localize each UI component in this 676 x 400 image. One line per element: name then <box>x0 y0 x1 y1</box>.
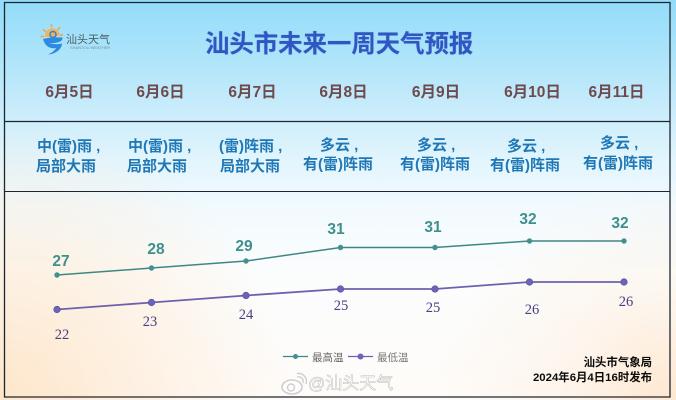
high temperature series: 27 <box>52 253 70 270</box>
weather: June 5: 中(雷)雨 , <box>37 138 100 155</box>
low temperature series: 22 <box>55 327 69 343</box>
weather: June 9 <box>400 136 470 173</box>
icon: sun and wave <box>40 24 64 54</box>
logo text: 汕头天气 <box>66 34 110 46</box>
high temperature series: 29 <box>235 238 253 255</box>
low temperature series: 26 <box>619 294 633 310</box>
date: June 5: 6月5日 <box>45 84 94 101</box>
weather: June 6: 局部大雨 <box>127 158 187 174</box>
title: 汕头市未来一周天气预报 <box>205 31 473 58</box>
logo subtitle: SHANTOU WEATHER <box>70 45 110 50</box>
weather: June 7: 局部大雨 <box>220 158 280 174</box>
watermark text: @汕头天气 <box>308 374 393 393</box>
weather: June 6 <box>127 138 191 174</box>
high temperature series: 31 <box>424 219 442 236</box>
low temperature series <box>54 279 633 343</box>
date: June 7: 6月7日 <box>228 84 277 101</box>
weather: June 9: 多云 , <box>417 136 455 154</box>
icon: weibo <box>281 372 307 395</box>
high temperature series: 32 <box>519 211 537 228</box>
weather: June 10: 多云 , <box>507 138 545 154</box>
high temperature series <box>52 211 629 278</box>
date: June 11: 6月11日 <box>588 84 644 101</box>
high temperature series: 28 <box>147 241 165 258</box>
legend: high: 最高温 <box>312 351 344 364</box>
date: June 10: 6月10日 <box>504 84 561 101</box>
weather: June 5: 局部大雨 <box>36 158 96 174</box>
watermark <box>281 372 393 395</box>
high temperature series: 32 <box>611 215 629 232</box>
weather: June 8: 有(雷)阵雨 <box>303 156 373 173</box>
low temperature series: 25 <box>426 300 440 316</box>
weather row <box>36 135 653 174</box>
low temperature series: 23 <box>143 314 157 330</box>
legend <box>283 351 409 364</box>
low temperature series: 24 <box>239 307 254 323</box>
high temperature series: 31 <box>327 221 345 238</box>
weather: June 8: 多云 , <box>320 136 358 154</box>
weather: June 10: 有(雷)阵雨 <box>490 157 560 174</box>
weather: June 10 <box>490 138 560 174</box>
weather: June 8 <box>303 136 373 173</box>
weather: June 6: 中(雷)雨 , <box>128 138 191 155</box>
date: June 9: 6月9日 <box>412 84 460 101</box>
date row <box>45 84 644 101</box>
source note: 汕头市气象局 <box>584 356 652 368</box>
weather: June 7: (雷)阵雨 , <box>219 138 282 155</box>
source note: 2024年6月4日16时发布 <box>533 372 652 384</box>
weather: June 9: 有(雷)阵雨 <box>400 156 470 173</box>
weather: June 11 <box>583 135 653 172</box>
weather: June 11: 有(雷)阵雨 <box>583 154 653 172</box>
logo: Shantou Weather <box>40 24 110 54</box>
date: June 8: 6月8日 <box>319 84 368 101</box>
date: June 6: 6月6日 <box>136 84 185 101</box>
weather: June 5 <box>36 138 100 174</box>
legend: low: 最低温 <box>377 351 409 364</box>
low temperature series: 26 <box>525 302 539 318</box>
source note <box>533 356 652 384</box>
low temperature series: 25 <box>334 298 348 314</box>
weather: June 7 <box>219 138 282 174</box>
weather: June 11: 多云 , <box>600 135 638 152</box>
